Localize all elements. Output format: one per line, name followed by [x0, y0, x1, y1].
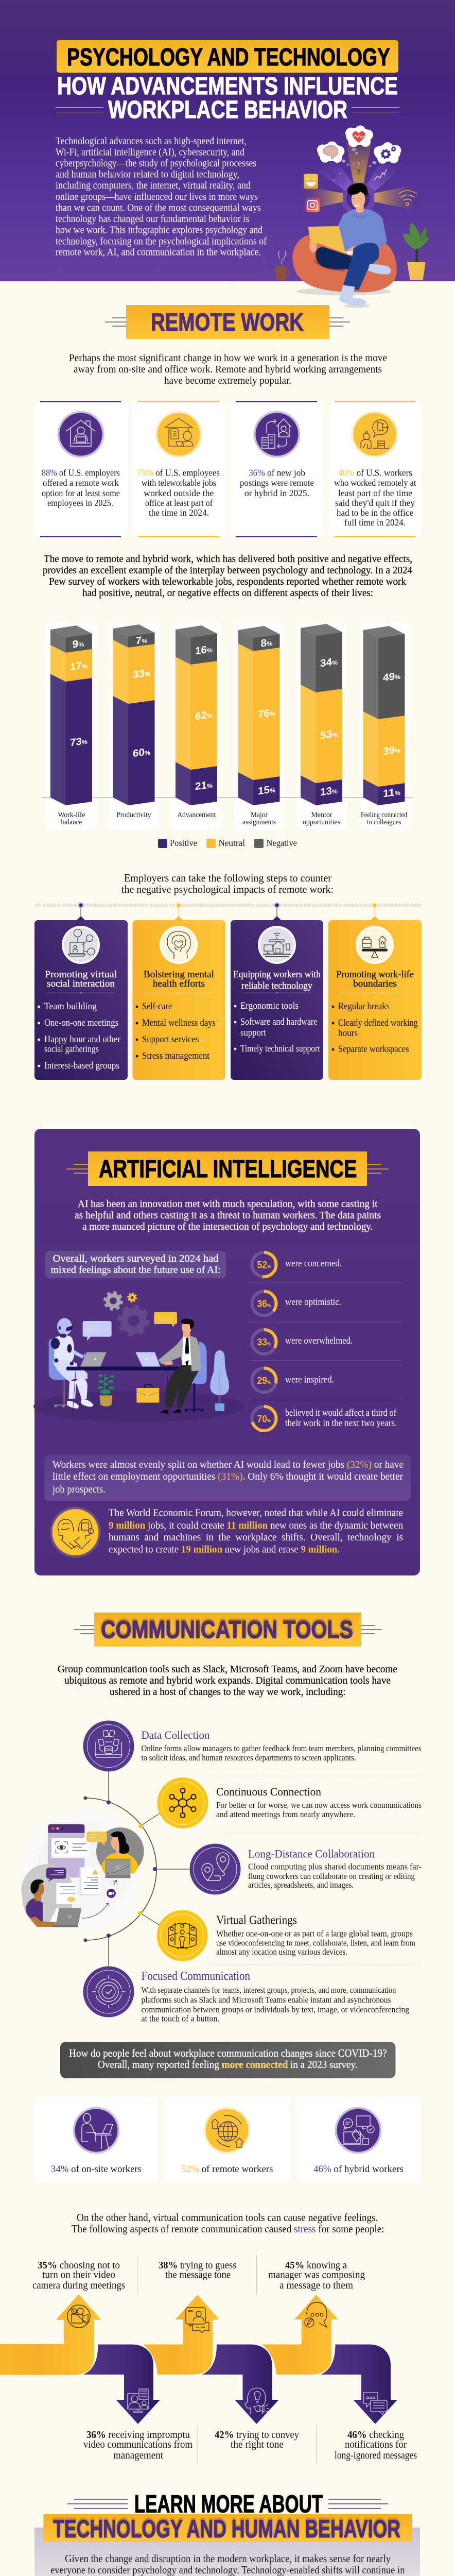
bar value labels: 73% [70, 735, 87, 749]
intro paragraph [56, 135, 267, 258]
text block: remote work intro: away from on-site and office work. Remote and hybrid working arrangements [74, 364, 382, 375]
intro paragraph: technology, focusing on the psychological implications of [56, 236, 267, 247]
bar category labels: Productivity [116, 811, 151, 819]
donut: 29% inspired: 29% [257, 1376, 271, 1386]
chart: stress arrows ribbon [0, 2295, 397, 2424]
intro paragraph: Wi-Fi, artificial intelligence (AI), cybersecurity, and [56, 146, 244, 158]
donut: 70% affected: believed it would affect a third of [285, 1408, 397, 1418]
callout: jobs split: job prospects. [52, 1484, 106, 1495]
heading: learn more about: LEARN MORE ABOUT [134, 2490, 323, 2518]
donut: 29% inspired: were inspired. [285, 1375, 334, 1385]
icon: wifi [398, 191, 417, 206]
intro paragraph: technology has changed our fundamental behavior is [56, 213, 249, 225]
question marks in beams: ? [339, 173, 341, 177]
legend: Neutral [218, 838, 245, 848]
plant [98, 1374, 115, 1406]
text block: remote work intro [69, 352, 387, 386]
panel: stat card 88%: 88% of U.S. employers [42, 468, 120, 478]
intro paragraph: Technological advances such as high-speed internet, [56, 135, 247, 147]
panel: stat card 88% [34, 401, 128, 537]
text block: bottom stress labels [83, 2426, 417, 2464]
bar value labels: 13% [320, 785, 338, 798]
intro paragraph: cyberpsychology—the study of psychological processes [56, 158, 256, 169]
bar value labels: 33% [133, 667, 150, 681]
briefcase [136, 1384, 159, 1403]
subtitle: how advancements influence workplace behavior [56, 73, 399, 124]
panel: bolstering mental health efforts: Self-care [142, 1002, 172, 1012]
item: data collection [83, 1721, 421, 1771]
panel: equipping workers with reliable technology: Software and hardware [240, 1017, 317, 1027]
text block: bottom stress labels: long-ignored messages [335, 2450, 417, 2461]
callout: feeling more connected: Overall, many reported feeling more connected in a 2023 survey. [98, 2058, 357, 2071]
text block: top stress labels: camera during meetings [32, 2280, 125, 2291]
icon: teleworker under roof [155, 411, 202, 457]
text block: top stress labels: manager was composing [268, 2270, 365, 2280]
icon: data collection [83, 1721, 134, 1771]
panel: artificial intelligence [33, 1129, 420, 1575]
donut: 36% optimistic [252, 1291, 341, 1316]
item: continuous connection: and attend meetings from nearly anywhere. [216, 1809, 355, 1819]
bar value labels: 17% [70, 659, 87, 673]
text block: bottom stress labels: 36% receiving impromptu [86, 2430, 190, 2441]
arrow: up 1 [0, 2295, 100, 2375]
bar: major assignments [238, 626, 280, 805]
text block: top stress labels: 35% choosing not to [38, 2260, 120, 2271]
item: data collection: Online forms allow managers to gather feedback from team members, planning committees [141, 1743, 421, 1753]
illustration: robot and man at desk [33, 1292, 244, 1422]
bar value labels: 53% [320, 728, 338, 741]
robot [49, 1318, 94, 1409]
bar category labels: assignments [242, 818, 276, 826]
item: virtual gatherings: use videoconferencing to meet, collaborate, listen, and learn from [216, 1938, 415, 1947]
panel: stat card 46%: full time in 2024. [344, 517, 406, 528]
icon: brain thought bubble [317, 141, 349, 166]
item: data collection: to solicit ideas, and human resources departments to screen applicants. [141, 1753, 356, 1762]
donut: 36% optimistic: were optimistic. [285, 1297, 341, 1308]
heading: remote work: REMOTE WORK [151, 309, 304, 336]
bar category labels: opportunities [303, 818, 340, 826]
arrow: up 2 [143, 2295, 219, 2375]
callout: feeling more connected [60, 2042, 395, 2078]
intro paragraph: than we can count. One of the most consequential ways [56, 202, 261, 213]
bar category labels [58, 811, 408, 826]
question marks in beams: ? [362, 162, 364, 165]
icon: smiling emoji tile [304, 174, 318, 189]
item: virtual gatherings: almost any location using various devices. [216, 1947, 347, 1957]
bar category labels: to colleagues [367, 818, 401, 826]
callout: jobs split: Workers were almost evenly split on whether AI would lead to fewer jobs (32%) or have [52, 1459, 404, 1470]
bar category labels: Mentor [311, 811, 332, 819]
text block: bottom stress labels: video communications from [83, 2439, 192, 2450]
item: virtual gatherings: Virtual Gatherings [216, 1913, 297, 1927]
question marks in beams: ? [352, 162, 355, 167]
heading: communication tools: COMMUNICATION TOOLS [101, 1617, 353, 1643]
item: focused communication [83, 1966, 409, 2024]
text block: AI intro [75, 1198, 381, 1232]
icon: office to home arrows [253, 411, 301, 457]
item: long-distance collaboration: articles, spreadsheets, and images. [248, 1880, 354, 1890]
text block: pew survey intro: had positive, neutral, or negative effects on different aspects of their lives: [82, 587, 373, 599]
panel: promoting work-life boundaries: Regular breaks [338, 1002, 390, 1012]
text block: negative feelings intro: On the other hand, virtual communication tools can cause negative feelings. [77, 2211, 378, 2224]
heading: communication tools [74, 1613, 382, 1647]
icon: impromptu video [128, 2389, 148, 2413]
panel: stat card 75%: 75% of U.S. employees [137, 468, 220, 478]
text block: pew survey intro: Pew survey of workers with teleworkable jobs, respondents reported whether remote work [49, 576, 406, 587]
panel: equipping workers with reliable technology: Timely technical support [240, 1044, 320, 1054]
bar: advancement [176, 625, 217, 805]
panel: stat card 36%: 36% of new job [249, 468, 305, 478]
text block: World Economic Forum: humans and machines in the workplace shifts. Overall, technology is [109, 1532, 403, 1543]
man in circle [22, 1864, 81, 1927]
icon: video conference gallery [156, 1910, 208, 1961]
icon: head with heart [160, 926, 198, 964]
text block: employers steps intro [121, 872, 334, 895]
donut: 70% affected [252, 1406, 397, 1431]
icon: remote worker in house [58, 411, 104, 457]
panel: promoting work-life boundaries: Separate workspaces [338, 1044, 409, 1055]
panel: stat card 36%: postings were remote [240, 478, 314, 488]
panel: hero header [0, 0, 455, 281]
panel: stat card 88%: option for at least some [42, 488, 120, 498]
panel: hybrid workers stat: 46% of hybrid workers [313, 2164, 404, 2175]
panel: promoting virtual social interaction [34, 920, 128, 1080]
intro paragraph: how we work. This infographic explores psychology and [56, 225, 262, 236]
item: data collection: Data Collection [141, 1728, 210, 1741]
connector arc and nodes [83, 1771, 189, 1967]
text block: remote work intro: have become extremely popular. [164, 375, 291, 386]
bar category labels: Feeling connected [361, 811, 408, 819]
text block: communication intro [58, 1664, 397, 1698]
text block: closing paragraph [48, 2552, 407, 2576]
panel: promoting virtual social interaction: Promoting virtual [45, 969, 117, 980]
callout: mixed feelings: mixed feelings about the future use of AI: [50, 1264, 220, 1276]
text block: closing paragraph: Given the change and disruption in the modern workplace, it makes sense for nearly [65, 2552, 391, 2565]
text block: top stress labels: turn on their video [42, 2270, 115, 2280]
text block: World Economic Forum: 9 million jobs, it could create 11 million new ones as the dynamic between [109, 1520, 403, 1531]
panel: stat card 36%: or hybrid in 2025. [244, 488, 309, 498]
icon: virtual meeting [62, 926, 100, 964]
text block: bottom stress labels: notifications for [345, 2439, 407, 2450]
donut: 33% overwhelmed: were overwhelmed. [285, 1336, 353, 1346]
panel: promoting virtual social interaction: Interest-based groups [44, 1061, 119, 1071]
heading: artificial intelligence [66, 1151, 389, 1186]
donut: 70% affected: their work in the next two years. [285, 1418, 397, 1429]
panel: stat card 75%: the time in 2024. [149, 507, 209, 518]
text block: bottom stress labels: 46% checking [347, 2430, 404, 2441]
bar value labels: 8% [260, 636, 273, 650]
intro paragraph: including computers, the internet, virtual reality, and [56, 180, 251, 191]
icon: instagram tile [305, 198, 320, 212]
icon: target with check [83, 1966, 134, 2018]
panel: hybrid workers stat [296, 2097, 421, 2182]
item: long-distance collaboration: flung coworkers can collaborate on creating or editing [248, 1871, 415, 1881]
icon: connection network [157, 1777, 208, 1828]
icon: hybrid workspace [335, 2107, 382, 2154]
item: focused communication: at the touch of a button. [141, 2013, 219, 2024]
donut: 33% overwhelmed: 33% [257, 1337, 271, 1348]
laptops and desk [66, 1352, 180, 1416]
panel: stat card 75%: office at least part of [145, 498, 213, 508]
arrow: down 3 [321, 2344, 397, 2424]
callout: mixed feelings: Overall, workers surveyed in 2024 had [52, 1253, 219, 1264]
panel: promoting virtual social interaction: social gatherings [44, 1044, 99, 1055]
item: focused communication: Focused Communication [141, 1970, 250, 1983]
icon: composing bubble [305, 2302, 327, 2327]
text block: pew survey intro [43, 553, 412, 599]
item: continuous connection: Continuous Connection [216, 1785, 321, 1798]
question marks in beams [330, 161, 387, 183]
subtitle: how advancements influence workplace behavior: WORKPLACE BEHAVIOR [108, 96, 347, 124]
man [158, 1318, 207, 1414]
text block: World Economic Forum [109, 1507, 403, 1555]
donut: 52% concerned: were concerned. [285, 1259, 342, 1269]
bar value labels: 9% [72, 637, 84, 651]
panel: stat card 46%: least part of the time [338, 488, 412, 498]
donut: 33% overwhelmed [252, 1330, 353, 1354]
bar value labels: 60% [133, 746, 150, 759]
text block: top stress labels [32, 2256, 365, 2294]
bar chart: effects of remote work [42, 622, 413, 829]
callout: jobs split: little effect on employment opportunities (31%). Only 6% thought it would create better [52, 1471, 403, 1482]
panel: stat card 88%: offered a remote work [43, 478, 119, 488]
icon: coffee mug [275, 251, 289, 280]
item: continuous connection [157, 1777, 422, 1828]
panel: promoting work-life boundaries: Clearly defined working [338, 1018, 418, 1028]
text block: AI intro: as helpful and others casting it as a threat to human workers. The data paints [75, 1210, 381, 1221]
item: long-distance collaboration: Cloud computing plus shared documents means far- [248, 1862, 422, 1871]
icon: ignored messages [363, 2393, 387, 2415]
text block: bottom stress labels: the right tone [231, 2439, 284, 2450]
panel: remote workers stat [165, 2097, 290, 2182]
panel: equipping workers with reliable technology [231, 920, 323, 1080]
bar value labels: 39% [383, 744, 400, 757]
text block: pew survey intro: provides an excellent example of the interplay between psychology and technology. In a 2024 [43, 565, 412, 576]
icon: balance of work and home [356, 926, 394, 964]
panel: stat card 36% [231, 401, 323, 537]
panel: bolstering mental health efforts: Bolstering mental [144, 969, 214, 980]
bar value labels: 15% [258, 784, 275, 797]
gears [104, 1292, 148, 1335]
arrow: up 3 [262, 2295, 338, 2375]
timeline: pins over step cards [34, 902, 422, 921]
item: continuous connection: For better or for worse, we can now access work communications [216, 1800, 422, 1810]
heading: remote work [105, 305, 350, 339]
panel: equipping workers with reliable technology: support [240, 1028, 267, 1038]
panel: learn more [34, 2490, 420, 2576]
icon: worker thinking of leaving [351, 411, 398, 457]
item: virtual gatherings: Whether one-on-one or as part of a large global team, groups [216, 1929, 413, 1938]
text block: communication intro: ubiquitous as remote and hybrid work expands. Digital communication tools have [64, 1675, 391, 1686]
text block: communication intro: ushered in a host of changes to the way we work, including: [110, 1686, 346, 1698]
icon: potted plant [403, 223, 429, 280]
arrow: down 2 [202, 2344, 279, 2424]
panel: on-site workers stat: 34% of on-site workers [51, 2164, 142, 2175]
panel: bolstering mental health efforts: health efforts [153, 978, 205, 989]
text block: employers steps intro: the negative psychological impacts of remote work: [121, 883, 334, 895]
legend [158, 838, 297, 848]
intro paragraph: and human behavior related to digital technology, [56, 169, 239, 180]
item: focused communication: platforms such as Slack and Microsoft Teams enable instant and asynchronous [141, 1995, 391, 2005]
legend: Positive [170, 838, 197, 848]
icon: globe and homes [204, 2107, 250, 2154]
panel: promoting work-life boundaries [328, 920, 422, 1080]
text block: AI intro: a more nuanced picture of the intersection of psychology and technology. [82, 1221, 373, 1232]
legend: Negative [267, 838, 297, 848]
bar category labels: balance [61, 818, 82, 826]
bar: mentor opportunities [301, 624, 342, 805]
panel: equipping workers with reliable technology: Ergonomic tools [240, 1001, 299, 1011]
panel: stat card 46%: said they'd quit if they [335, 498, 415, 508]
icon: camera off [67, 2305, 90, 2328]
text block: top stress labels: a message to them [279, 2280, 353, 2291]
item: virtual gatherings [156, 1910, 415, 1961]
panel: on-site workers stat [34, 2097, 158, 2182]
speech bubbles [83, 1312, 177, 1341]
light beams [299, 143, 421, 215]
panel: stat card 46%: who worked remotely at [334, 478, 416, 488]
text block: employers steps intro: Employers can take the following steps to counter [124, 872, 331, 884]
woman in circle [96, 1827, 144, 1878]
icon: home office equipment [258, 926, 296, 964]
panel: stat card 75%: with teleworkable jobs [142, 478, 216, 488]
panel: stat card 75%: worked outside the [144, 488, 214, 498]
panel: bolstering mental health efforts: Stress management [142, 1051, 210, 1061]
bar: work-life balance [50, 625, 92, 805]
bar value labels: 11% [383, 786, 400, 800]
text block: bottom stress labels: 42% trying to convey [215, 2430, 299, 2441]
icon: map pins [189, 1843, 241, 1895]
bar value labels: 76% [258, 707, 275, 720]
yellow speech bubble [86, 1832, 107, 1846]
icon: worker at desk [73, 2107, 119, 2154]
panel: equipping workers with reliable technology: reliable technology [241, 980, 312, 991]
bar value labels: 7% [136, 634, 148, 647]
icon: video call and arrows [82, 1880, 118, 1918]
donut: 29% inspired [252, 1368, 334, 1392]
bar: feeling connected to colleagues [363, 626, 405, 805]
text block: negative feelings intro: The following aspects of remote communication caused stress for some people: [72, 2223, 384, 2235]
item: focused communication: With separate channels for teams, interest groups, projects, and more, communication [141, 1985, 396, 1995]
bar value labels: 21% [195, 779, 213, 792]
intro paragraph: remote work, AI, and communication in the workplace. [56, 246, 261, 258]
panel: stat card 46% [328, 401, 422, 537]
text block: top stress labels: the message tone [165, 2270, 231, 2280]
bar value labels [70, 634, 400, 800]
text block: top stress labels: 38% trying to guess [159, 2260, 237, 2271]
icon: heart thought bubble [345, 125, 373, 155]
text block: negative feelings intro [72, 2211, 384, 2235]
item: focused communication: communication between groups or individuals by text, image, or videoconferencing [141, 2005, 409, 2014]
icon: human and AI handshake [50, 1506, 101, 1558]
panel: promoting virtual social interaction: One-on-one meetings [44, 1018, 118, 1028]
panel: promoting work-life boundaries: boundaries [353, 978, 397, 989]
callout: jobs split [44, 1454, 411, 1501]
panel: promoting work-life boundaries: Promoting work-life [336, 969, 414, 980]
callout: feeling more connected: How do people feel about workplace communication changes since COVID-19? [69, 2047, 387, 2059]
panel: stat card 88%: employees in 2025. [47, 498, 113, 508]
panel: stat card 46%: 46% of U.S. workers [338, 468, 412, 478]
illustration: person on bean bag with thought bubbles [232, 125, 437, 308]
item: long-distance collaboration: Long-Distance Collaboration [248, 1848, 375, 1860]
panel: equipping workers with reliable technology: Equipping workers with [233, 969, 321, 980]
panel: stat card 75% [132, 401, 225, 537]
bar value labels: 49% [383, 670, 400, 684]
bar value labels: 62% [195, 709, 213, 722]
arrow: down 1 [83, 2344, 160, 2424]
text block: pew survey intro: The move to remote and hybrid work, which has delivered both positive and negative effects, [44, 553, 412, 565]
heading: artificial intelligence: ARTIFICIAL INTELLIGENCE [99, 1156, 357, 1183]
text block: World Economic Forum: expected to create 19 million new jobs and erase 9 million. [109, 1544, 340, 1555]
bar category labels: Advancement [177, 811, 216, 819]
text block: top stress labels: 45% knowing a [285, 2260, 347, 2271]
panel: bolstering mental health efforts [133, 920, 225, 1080]
bar value labels: 16% [195, 643, 213, 657]
panel: promoting virtual social interaction: Happy hour and other [44, 1035, 120, 1045]
panel: remote workers stat: 52% of remote workers [181, 2164, 273, 2175]
item: long-distance collaboration [189, 1843, 422, 1895]
panel: stat card 46%: had to be in the office [337, 507, 413, 518]
bar: productivity [113, 624, 154, 805]
panel: promoting work-life boundaries: hours [338, 1028, 358, 1039]
icon: message with person [186, 2308, 209, 2333]
text block: bottom stress labels: management [113, 2450, 164, 2461]
text block: closing paragraph: everyone to consider psychology and technology. Technology-enabled shifts will continue in [50, 2564, 405, 2576]
panel: bolstering mental health efforts: Support services [142, 1035, 199, 1045]
browser window [48, 1824, 92, 1877]
panel: bolstering mental health efforts: Mental wellness days [142, 1018, 216, 1028]
icon: thinking head [245, 2388, 269, 2414]
bean bag [292, 234, 397, 295]
bar category labels: Major [251, 811, 268, 819]
callout: mixed feelings [45, 1251, 226, 1278]
text block: World Economic Forum: The World Economic Forum, however, noted that while AI could eliminate [109, 1507, 403, 1519]
donut: 52% concerned: 52% [257, 1260, 271, 1270]
donut: 52% concerned [252, 1252, 342, 1277]
text block: remote work intro: Perhaps the most significant change in how we work in a generation is the move [69, 352, 387, 364]
question marks in beams: ? [357, 168, 361, 177]
text block: communication intro: Group communication tools such as Slack, Microsoft Teams, and Zoom have become [58, 1664, 397, 1675]
purple speech bubble [46, 1868, 66, 1882]
question marks in beams: ? [357, 161, 360, 167]
person [308, 183, 391, 308]
donut: 36% optimistic: 36% [257, 1299, 271, 1310]
donut: 70% affected: 70% [257, 1414, 271, 1425]
panel: promoting virtual social interaction: Team building [44, 1002, 97, 1012]
bar value labels: 34% [320, 656, 338, 669]
panel: promoting virtual social interaction: social interaction [47, 978, 115, 989]
intro paragraph: online groups—have influenced our lives in more ways [56, 191, 258, 202]
icon: gears thought bubble [369, 142, 401, 167]
tall plant [210, 1350, 229, 1411]
text block: AI intro: AI has been an innovation met with much speculation, with some casting it [78, 1198, 378, 1210]
illustration: remote collaboration hub [22, 1808, 144, 1930]
question marks in beams: ? [330, 173, 336, 181]
bar category labels: Work-life [58, 811, 85, 819]
documents [56, 1867, 100, 1904]
question marks in beams: ? [333, 178, 335, 183]
